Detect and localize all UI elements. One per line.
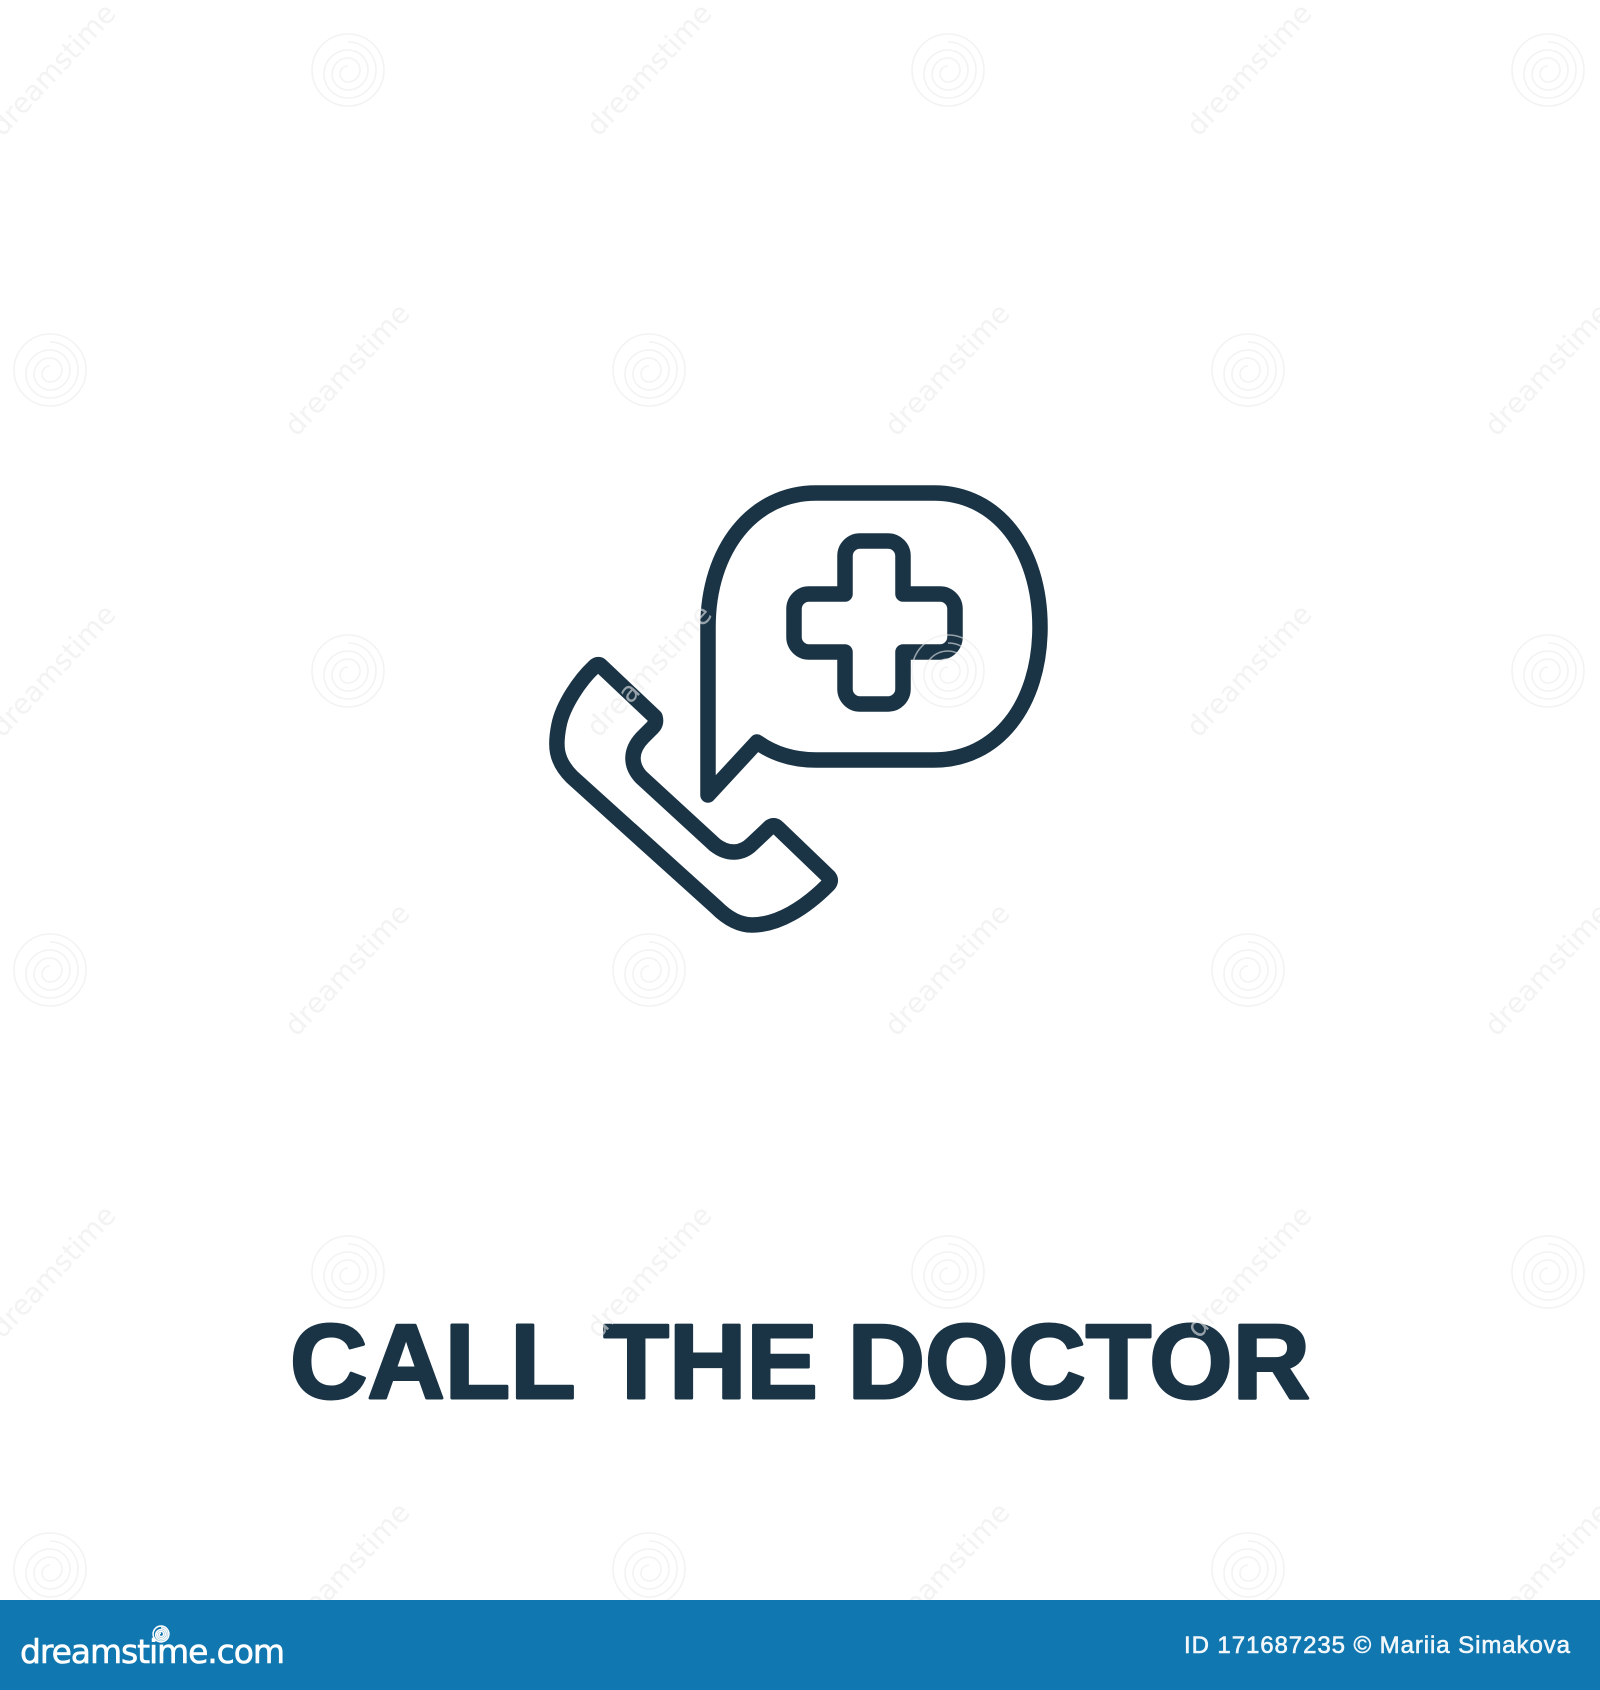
- watermark pattern: dreamstime: [1180, 0, 1318, 142]
- watermark pattern: dreamstime: [580, 0, 718, 142]
- icon: medical cross: [794, 541, 955, 704]
- footer credit: ID 171687235 © Mariia Simakova: [1184, 1632, 1571, 1659]
- watermark pattern: dreamstime: [1180, 598, 1318, 743]
- watermark pattern: dreamstime: [580, 598, 718, 743]
- watermark pattern: dreamstime: [1180, 1199, 1318, 1344]
- footer bar: [0, 1600, 1600, 1690]
- icon: phone handset with medical speech bubble: [557, 493, 1040, 925]
- watermark pattern: dreamstime: [278, 1496, 416, 1641]
- watermark pattern: dreamstime: [878, 1496, 1016, 1641]
- title: CALL THE DOCTOR: [290, 1303, 1310, 1421]
- watermark pattern: dreamstime: [878, 297, 1016, 442]
- watermark pattern: dreamstime: [878, 897, 1016, 1042]
- icon: logo spiral: [153, 1626, 169, 1642]
- watermark pattern: dreamstime: [580, 1199, 718, 1344]
- icon: telephone handset: [557, 665, 830, 925]
- footer logo: dreamstime.com: dreamstime.com: [20, 1632, 285, 1671]
- watermark pattern: dreamstime: [278, 297, 416, 442]
- icon: speech bubble: [708, 493, 1040, 795]
- watermark pattern: dreamstime: [278, 897, 416, 1042]
